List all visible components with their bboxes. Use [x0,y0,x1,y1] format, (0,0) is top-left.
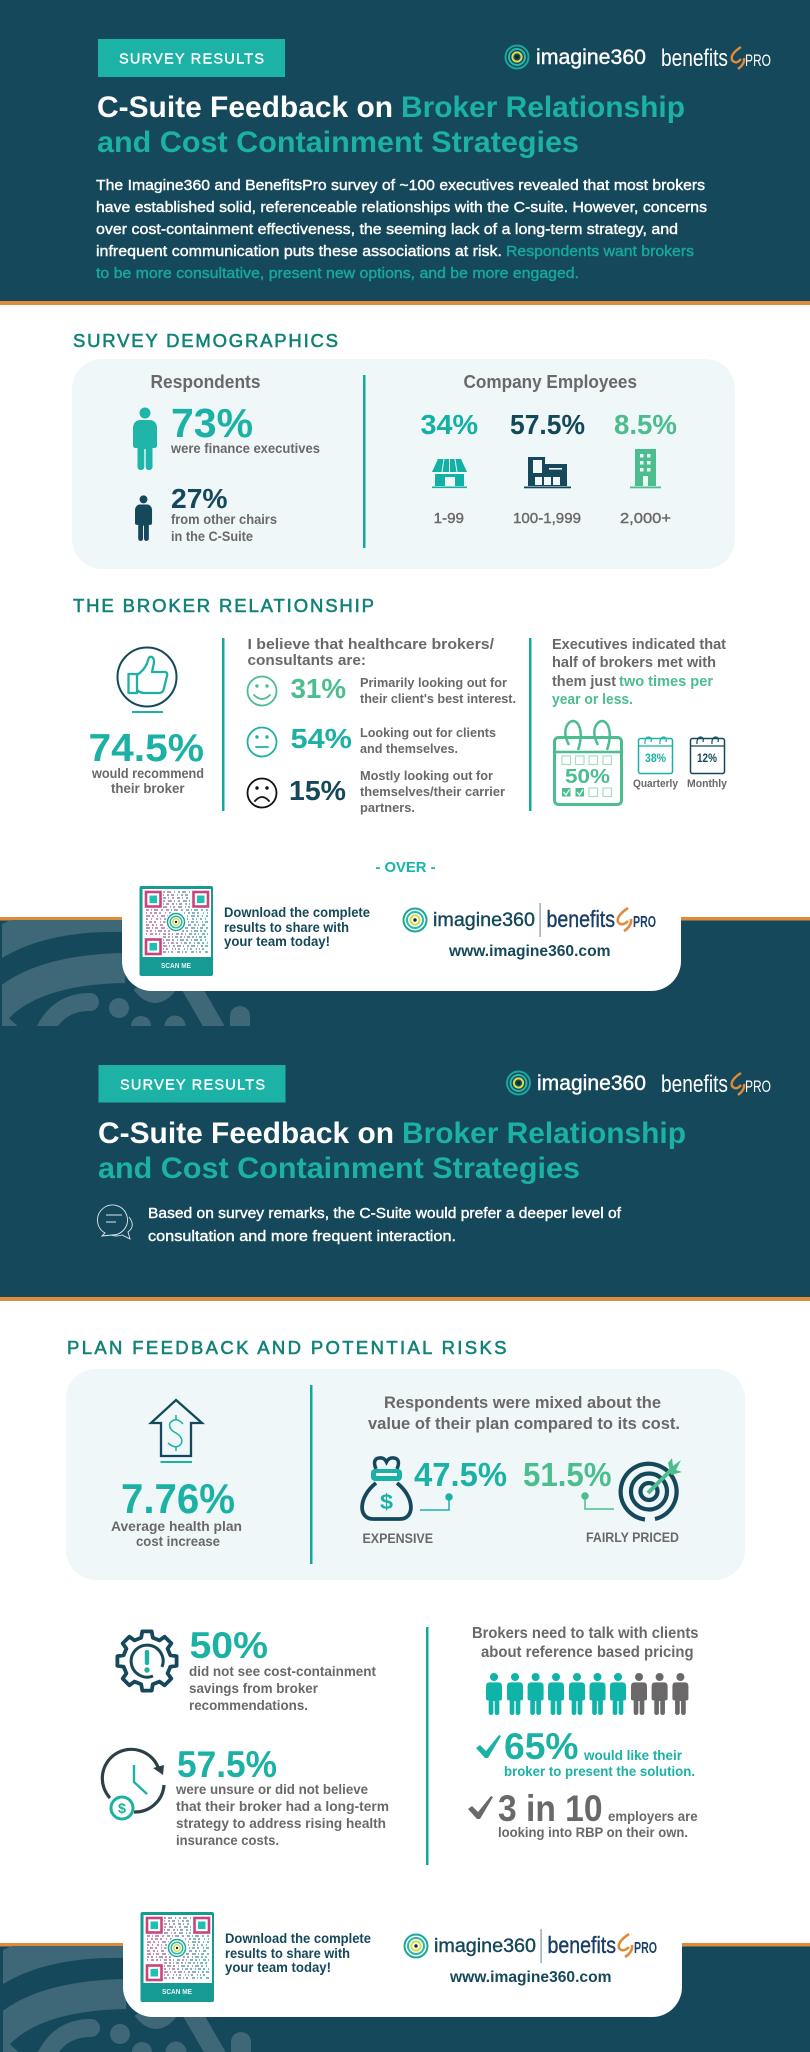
respondents column: Respondents [150,372,260,392]
stat: no cost containment savings: 50% [190,1625,268,1666]
reference based pricing column: broker to present the solution. [504,1763,695,1779]
stat: no cost containment savings: recommendations. [189,1697,308,1713]
broker beliefs: Looking out for clients [360,726,496,740]
logo lockup: www.imagine360.com [448,943,610,960]
stat: no long-term strategy: strategy to address rising health [176,1815,386,1831]
icon: grey check [468,1796,493,1819]
value vs cost: FAIRLY PRICED [586,1530,679,1545]
value vs cost: value of their plan compared to its cost. [368,1415,680,1433]
reference based pricing column: 3 in 10 [498,1788,602,1829]
download prompt: results to share with [225,1946,350,1961]
icon: neutral face [248,728,276,756]
heading: the broker relationship: THE BROKER RELATIONSHIP [73,595,374,616]
title: Broker Relationship [401,91,685,124]
title: C-Suite Feedback on [97,91,393,124]
icon: dark person [135,495,152,541]
title [98,1117,686,1185]
respondents column: 73% [171,400,253,446]
icon: clock with dollar [102,1749,164,1819]
cost increase stat [111,1400,242,1549]
recommendation stat: would recommend [91,766,204,781]
recommendation stat: 74.5% [88,727,204,770]
intro paragraph: infrequent communication puts these associations at risk. [96,243,502,260]
icon: mid-size factory [524,457,571,488]
intro paragraph: Respondents want brokers [506,243,694,260]
icon: teal check [476,1735,501,1758]
logo lockup: PRO [634,1940,657,1957]
download prompt: your team today! [225,1960,331,1975]
intro paragraph: The Imagine360 and BenefitsPro survey of ~100 executives revealed that most brokers [96,177,705,194]
reference based pricing column [468,1625,698,1840]
broker beliefs: 54% [290,723,352,754]
meeting frequency: two times per [619,674,713,690]
logo lockup: benefits [546,906,615,932]
logo: imagine360: imagine360 [536,46,646,69]
company employees column: 34% [420,409,478,440]
title: Broker Relationship [402,1117,686,1150]
footer panel: page one [0,886,810,1301]
reference based pricing column: looking into RBP on their own. [498,1824,688,1840]
logo: benefitspro: benefits [661,1071,728,1098]
icon: thumbs up [118,648,176,713]
intro paragraph: over cost-containment effectiveness, the seeming lack of a long-term strategy, and [96,221,678,238]
download prompt [224,905,370,949]
meeting frequency: year or less. [552,692,633,708]
stat: no cost containment savings: savings from broker [189,1680,319,1696]
broker beliefs: Primarily looking out for [360,676,507,690]
logo: benefitspro: PRO [745,51,771,70]
cost increase stat: cost increase [136,1534,220,1549]
panel: survey demographics [72,359,735,569]
decorative ripple [0,1943,241,2052]
icon: dollar arrow up [151,1400,202,1463]
logo: benefitspro: benefits [661,45,728,72]
icon: clock with dollar: $ [118,1800,126,1816]
icon: office tower [630,449,661,488]
recommendation stat [88,648,204,796]
meeting frequency: Quarterly [633,778,679,790]
fairly priced connector [582,1493,614,1509]
title: and Cost Containment Strategies [97,126,579,159]
logo lockup: PRO [633,914,656,931]
respondents column: 27% [171,483,228,514]
icon: gear with alert [117,1631,177,1691]
icon: sad face [248,778,276,808]
icon: money bag [362,1458,411,1519]
broker beliefs: Mostly looking out for [360,769,493,783]
white card [123,1943,682,2017]
icon: small shop [432,459,467,488]
stat: no long-term strategy: 57.5% [177,1744,277,1785]
intro sentence: consultation and more frequent interaction. [148,1228,456,1245]
intro paragraph [96,177,707,282]
download prompt: Download the complete [225,1931,371,1946]
reference based pricing column: would like their [583,1747,683,1763]
broker beliefs [248,636,516,815]
logo: benefitspro: PRO [745,1077,771,1096]
badge: survey results [98,1065,286,1102]
title: and Cost Containment Strategies [98,1152,580,1185]
icon: large calendar 50%: 50% [565,766,610,788]
cost increase stat: 7.76% [121,1475,235,1522]
icon: small calendar 38%: 38% [645,751,666,765]
badge: survey results: SURVEY RESULTS [120,1078,265,1094]
value vs cost: 51.5% [523,1456,612,1493]
white card [122,917,681,991]
company employees column: 57.5% [510,409,585,440]
logo lockup: imagine360 [434,1935,536,1957]
icon: smile face [248,676,276,706]
icon: target with arrow [621,1458,682,1520]
respondents column: from other chairs [171,512,277,527]
panel: plan feedback [66,1369,745,1580]
recommendation stat: their broker [111,781,185,796]
company employees column: 100-1,999 [513,511,581,527]
download prompt: Download the complete [224,905,370,920]
logo lockup [404,903,656,960]
title [97,91,685,159]
broker beliefs: 31% [290,673,346,704]
icon: small calendar 38% [638,737,673,774]
value vs cost [362,1394,682,1546]
title: C-Suite Feedback on [98,1117,394,1150]
download prompt: results to share with [224,920,349,935]
reference based pricing column: 65% [504,1726,578,1767]
intro sentence [148,1205,622,1245]
panel: broker relationship [88,636,728,815]
meeting frequency: Executives indicated that [552,637,726,653]
stat: no long-term strategy: insurance costs. [176,1832,279,1848]
qr code: SCAN ME [161,961,191,970]
meeting frequency: half of brokers met with [552,655,716,671]
company employees column: 1-99 [434,511,464,527]
qr code: SCAN ME [162,1987,192,1996]
stat: no long-term strategy: that their broker had a long-term [176,1798,389,1814]
stat: no cost containment savings [117,1625,376,1713]
download prompt [225,1931,371,1975]
logo lockup: benefits [548,1932,616,1958]
icon: teal person [133,408,157,470]
icon: large calendar 50% [554,721,622,804]
reference based pricing column: employers are [608,1808,698,1824]
value vs cost: Respondents were mixed about the [384,1394,661,1412]
header panel: page one [0,0,810,305]
meeting frequency: them just [552,674,616,690]
respondents column [133,372,320,544]
respondents column: were finance executives [170,441,320,456]
qr code [140,886,213,976]
intro paragraph: to be more consultative, present new options, and be more engaged. [96,265,579,282]
expensive connector [420,1494,452,1510]
logo lockup: imagine360 [433,909,535,931]
intro sentence: Based on survey remarks, the C-Suite would prefer a deeper level of [148,1205,622,1222]
respondents column: in the C-Suite [171,529,253,544]
reference based pricing column: Brokers need to talk with clients [472,1625,698,1642]
icon: small calendar 12% [690,737,725,774]
over marker: - OVER - [376,859,436,876]
badge: survey results [98,39,285,77]
broker beliefs: their client's best interest. [360,692,516,706]
download prompt: your team today! [224,934,330,949]
stat: no long-term strategy [102,1744,389,1848]
icon row: ten people [486,1673,688,1715]
broker beliefs: partners. [360,801,415,815]
stat: no cost containment savings: did not see cost-containment [189,1663,376,1679]
broker beliefs: 15% [289,775,346,806]
logo lockup [404,1929,657,1986]
meeting frequency [552,637,728,804]
reference based pricing column: about reference based pricing [481,1644,694,1661]
icon: small calendar 12%: 12% [697,751,717,765]
value vs cost: 47.5% [414,1456,507,1493]
company employees column [420,372,677,527]
meeting frequency: Monthly [687,778,728,790]
broker beliefs: consultants are: [248,652,366,669]
company employees column: 2,000+ [620,511,671,527]
logo lockup: www.imagine360.com [449,1969,612,1986]
intro paragraph: have established solid, referenceable relationships with the C-suite. However, concerns [96,199,707,216]
icon: speech bubbles [97,1205,132,1239]
heading: survey demographics: SURVEY DEMOGRAPHICS [73,330,338,351]
broker beliefs: and themselves. [360,742,458,756]
logo: imagine360: imagine360 [537,1072,646,1095]
header panel: page two [0,1065,810,1301]
qr code [140,1912,214,2002]
broker beliefs: I believe that healthcare brokers/ [248,636,495,653]
company employees column: 8.5% [614,409,677,440]
broker beliefs: themselves/their carrier [360,785,505,799]
footer panel: page two [0,1912,810,2052]
cost increase stat: Average health plan [111,1519,242,1534]
heading: plan feedback: PLAN FEEDBACK AND POTENTIAL RISKS [67,1337,506,1358]
icon: money bag: $ [380,1491,393,1514]
value vs cost: EXPENSIVE [362,1531,433,1546]
stat: no long-term strategy: were unsure or did not believe [175,1781,368,1797]
company employees column: Company Employees [464,372,637,392]
badge: survey results: SURVEY RESULTS [119,52,264,68]
decorative ripple [0,917,240,1036]
